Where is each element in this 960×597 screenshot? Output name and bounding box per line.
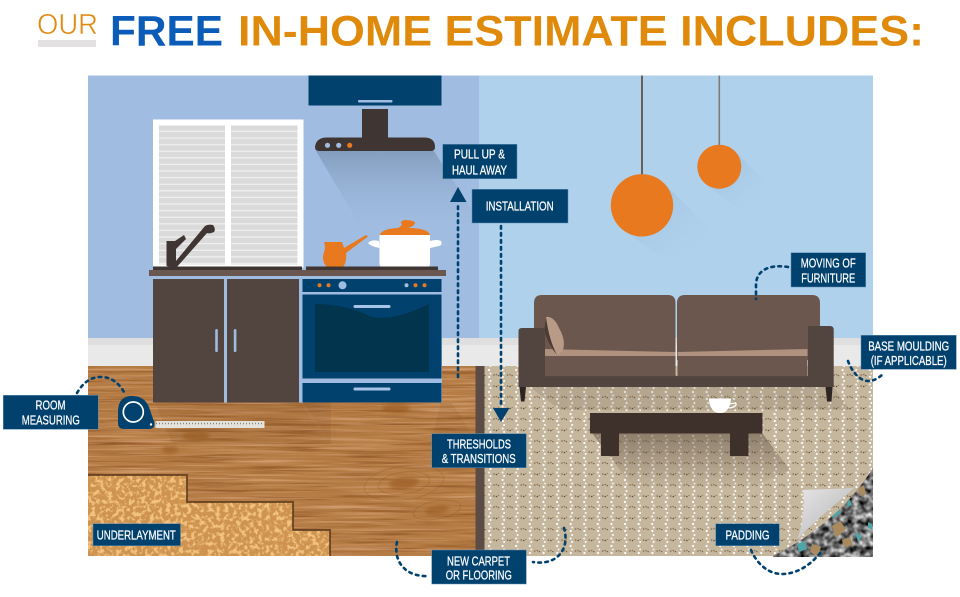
title word: free: FREE <box>110 8 223 56</box>
label: pull up and haul away: HAUL AWAY <box>452 162 507 178</box>
carpet curl <box>797 488 854 540</box>
skirting board <box>88 338 873 366</box>
arrow: pull up and haul away <box>450 187 466 377</box>
faucet <box>166 225 215 268</box>
coffee table <box>590 413 790 490</box>
kitchen wall <box>88 76 479 338</box>
cork underlayment <box>88 475 331 556</box>
pendant lamp: small <box>697 76 780 222</box>
cabinets <box>153 279 299 402</box>
living room wall <box>479 76 873 338</box>
title words: in-home estimate includes: IN-HOME ESTIMATE INCLUDES: <box>238 8 924 56</box>
label: moving of furniture: MOVING OF <box>801 256 856 271</box>
pillow <box>544 317 564 355</box>
hood light cone <box>316 151 479 236</box>
label: new carpet or flooring <box>432 550 526 584</box>
sofa <box>518 295 850 410</box>
label: new carpet or flooring: NEW CARPET <box>447 553 510 568</box>
carpet <box>484 366 873 556</box>
label: underlayment <box>93 524 180 546</box>
label: base moulding <box>861 335 956 369</box>
hood body <box>315 109 435 151</box>
label: pull up and haul away <box>443 144 517 179</box>
floor divider strip <box>476 366 484 556</box>
oven <box>299 279 442 402</box>
label: installation <box>472 189 568 223</box>
label: padding <box>716 524 779 546</box>
seat cushions <box>545 349 676 356</box>
room scene <box>88 76 874 558</box>
legs <box>520 387 526 402</box>
label: pull up and haul away: PULL UP & <box>454 146 505 162</box>
label: installation: INSTALLATION <box>486 199 554 214</box>
label: padding: PADDING <box>726 528 770 543</box>
connector: padding <box>751 550 821 574</box>
connector: new carpet right <box>533 528 566 563</box>
label: moving of furniture <box>791 253 866 287</box>
title word: our: OUR <box>37 9 98 41</box>
label: room measuring: ROOM <box>36 398 66 413</box>
label: underlayment: UNDERLAYMENT <box>97 528 176 543</box>
arrow: installation <box>493 226 510 422</box>
label: moving of furniture: FURNITURE <box>801 270 855 285</box>
padding under carpet <box>770 465 874 558</box>
connector: room measuring <box>77 377 125 394</box>
connector: new carpet left <box>396 542 428 576</box>
connector: moving of furniture <box>756 266 788 299</box>
window with blinds <box>153 120 304 268</box>
label: new carpet or flooring: OR FLOORING <box>446 568 512 583</box>
coffee cup <box>709 398 736 413</box>
connector: base moulding <box>848 361 884 381</box>
wood floor <box>88 366 476 556</box>
sofa back <box>534 295 676 360</box>
label: thresholds and transitions <box>432 434 526 468</box>
tape measure <box>118 396 264 429</box>
label: room measuring: MEASURING <box>22 412 80 427</box>
title <box>37 8 924 56</box>
label: thresholds and transitions: THRESHOLDS <box>447 437 511 452</box>
label: room measuring <box>3 395 98 429</box>
arms and base <box>518 326 834 387</box>
counter <box>149 266 446 279</box>
wall cabinet <box>308 76 442 106</box>
range hood <box>308 76 479 236</box>
label: thresholds and transitions: & TRANSITIONS <box>442 451 516 466</box>
pendant lamp: large <box>611 76 725 279</box>
cooking pot <box>368 220 442 267</box>
coffee pot <box>323 235 368 267</box>
